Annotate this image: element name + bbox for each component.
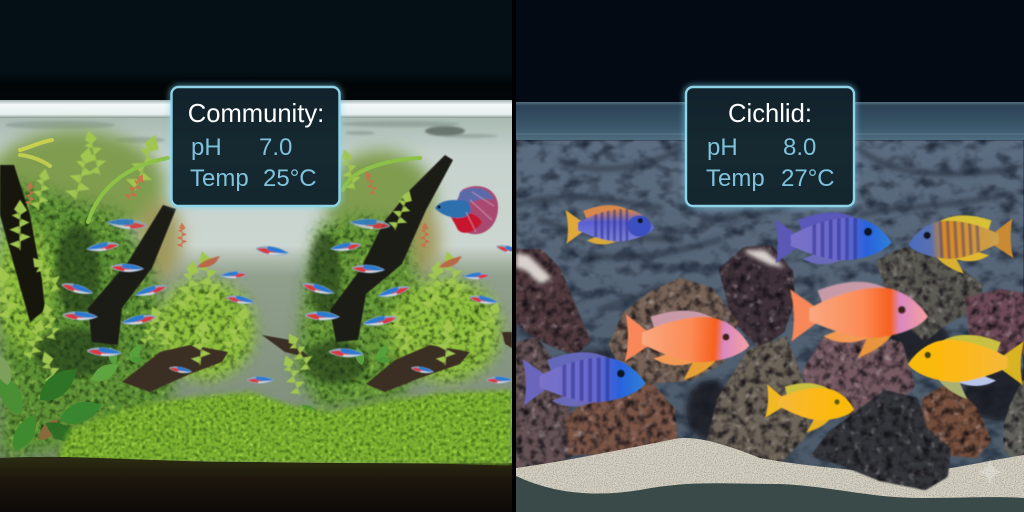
callout: cichlid water parameters bbox=[686, 87, 854, 206]
dark room background above the tank bbox=[516, 0, 1024, 102]
rear stone wall bbox=[516, 140, 1024, 480]
glass rim bbox=[516, 102, 1024, 140]
dark gaps behind rocks bbox=[565, 318, 1024, 440]
rock: mauve centre bbox=[805, 332, 912, 415]
sprigs: reddish stem tips bbox=[25, 169, 430, 248]
rock: brown right bbox=[925, 385, 988, 455]
water surface ripples bbox=[5, 121, 498, 143]
white patches on rock tops bbox=[516, 250, 785, 284]
fish: lower yellow cichlid bbox=[763, 379, 856, 436]
dark room background above the tank bbox=[0, 0, 512, 84]
pH row: pH bbox=[707, 134, 738, 161]
fish: centre orange-pink cichlid bbox=[622, 308, 751, 383]
rock: purple right bbox=[968, 292, 1024, 356]
fish: betta bbox=[435, 186, 498, 234]
driftwood: low logs bbox=[122, 332, 512, 392]
background plant haze bbox=[0, 130, 440, 280]
temperature row: 27°C bbox=[781, 165, 835, 192]
sprigs: pale green stem plants bbox=[0, 128, 506, 398]
rock: dark stone pile bbox=[815, 393, 948, 487]
driftwood: centre-left branch bbox=[88, 205, 176, 345]
dark substrate bbox=[0, 457, 512, 512]
fish: orange and blue cichlid bbox=[907, 213, 1015, 276]
plant mass: bright bushes bbox=[0, 220, 501, 382]
wall crevices bbox=[516, 150, 1010, 310]
fish: top left striped cichlid bbox=[566, 205, 654, 244]
rock: grey brown tall bbox=[710, 340, 808, 468]
curved long leaves bbox=[20, 140, 420, 222]
broad foreground leaves bbox=[0, 342, 391, 455]
icon: sparkle watermark bbox=[976, 458, 1004, 486]
temperature row: Temp bbox=[706, 165, 765, 192]
heading: cichlid: Cichlid: bbox=[728, 100, 812, 128]
lid light bar bbox=[0, 100, 512, 118]
rock: tall dark with white top bbox=[722, 248, 792, 345]
rock: left bbox=[516, 252, 587, 352]
panel: cichlid aquarium (right) bbox=[516, 0, 1024, 512]
driftwood: left post bbox=[0, 165, 45, 322]
water bbox=[0, 118, 512, 463]
front sand shadow edge bbox=[516, 476, 1024, 512]
fish: large right orange-pink cichlid bbox=[790, 282, 928, 358]
carpet of bright moss bbox=[55, 390, 512, 465]
shaded plant interior bbox=[33, 224, 367, 384]
temperature row: 25°C bbox=[263, 165, 317, 192]
heading: community: Community: bbox=[188, 100, 324, 128]
rock: lower left bbox=[516, 340, 575, 465]
pH row: 7.0 bbox=[259, 134, 292, 161]
fish: neon tetra school bbox=[61, 217, 524, 383]
fish: upper blue cichlid bbox=[774, 213, 892, 264]
fish: right yellow cichlid bbox=[908, 335, 1024, 399]
rim highlight line bbox=[516, 134, 1024, 135]
pH row: pH bbox=[191, 134, 222, 161]
panel: community aquarium (left) bbox=[0, 0, 524, 512]
callout: community water parameters bbox=[172, 87, 340, 206]
divider between panels bbox=[512, 0, 516, 512]
plant mass: second cluster bbox=[295, 215, 425, 410]
plant mass: left cluster bbox=[0, 180, 175, 460]
rock: brown centre bbox=[612, 281, 735, 382]
driftwood: right branch bbox=[330, 155, 453, 342]
fish: lower blue cichlid bbox=[522, 352, 646, 406]
sand floor bbox=[516, 438, 1024, 512]
pH row: 8.0 bbox=[783, 134, 816, 161]
rock: brown lower bbox=[568, 385, 675, 452]
rock: far right grey bbox=[1004, 382, 1024, 466]
rock: grey bbox=[880, 250, 980, 338]
temperature row: Temp bbox=[190, 165, 249, 192]
